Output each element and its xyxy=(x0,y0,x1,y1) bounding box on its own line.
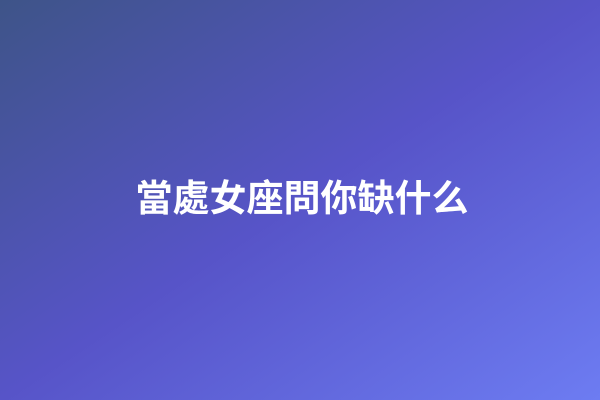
title: 當處女座問你缺什么 xyxy=(136,178,468,219)
